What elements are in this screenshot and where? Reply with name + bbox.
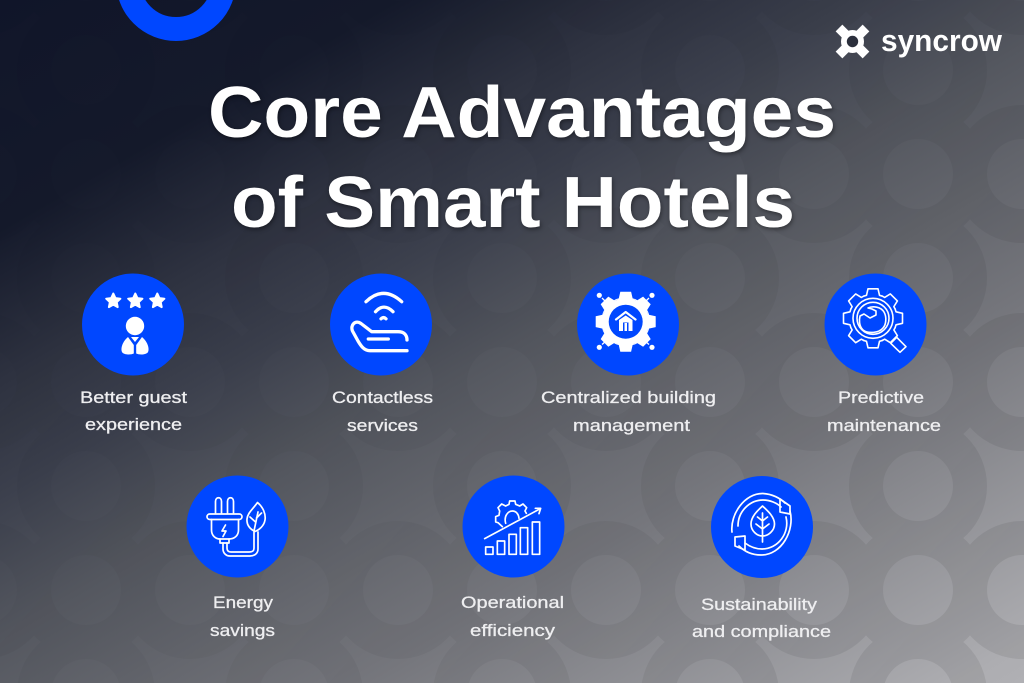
- title: Core Advantages: [208, 73, 836, 153]
- item: operational efficiency: efficiency: [470, 621, 556, 640]
- label: Operational: [461, 593, 564, 612]
- item: energy savings: [186, 476, 288, 640]
- item: contactless services: services: [347, 416, 418, 435]
- icon: three stars and guest: [106, 294, 164, 354]
- icon: leaf in circular arrows: [732, 493, 791, 555]
- item: predictive maintenance: [824, 274, 941, 435]
- label: Better guest: [80, 388, 187, 407]
- label: Energy: [213, 593, 274, 612]
- icon: plug with leaf: [207, 498, 265, 556]
- label: Contactless: [332, 388, 433, 407]
- item: predictive maintenance: maintenance: [827, 416, 941, 435]
- label: Sustainability: [701, 595, 818, 614]
- icon: hand with wifi: [352, 293, 407, 351]
- item: sustainability and compliance: [692, 476, 831, 641]
- icon: gear, rising arrow and bars: [485, 501, 541, 554]
- title: [208, 73, 836, 243]
- label: Centralized building: [541, 388, 716, 407]
- item: contactless services: [330, 274, 433, 435]
- icon: syncrow mark: [839, 28, 866, 55]
- item: energy savings: savings: [210, 621, 275, 640]
- item: operational efficiency: [461, 476, 564, 640]
- logo wordmark: syncrow: [881, 24, 1002, 58]
- item: centralized building management: [541, 274, 716, 435]
- icon: gear with house: [596, 292, 655, 351]
- icon: gear, magnifier and wrench: [844, 289, 906, 352]
- item: sustainability and compliance: and compliance: [692, 622, 831, 641]
- label: Predictive: [838, 388, 924, 407]
- item: better guest experience: [80, 274, 187, 434]
- item: better guest experience: experience: [85, 415, 182, 434]
- logo: syncrow: [839, 24, 1002, 58]
- item: centralized building management: management: [573, 416, 690, 435]
- title: of Smart Hotels: [231, 163, 795, 243]
- decorative blue ring: [128, 0, 224, 29]
